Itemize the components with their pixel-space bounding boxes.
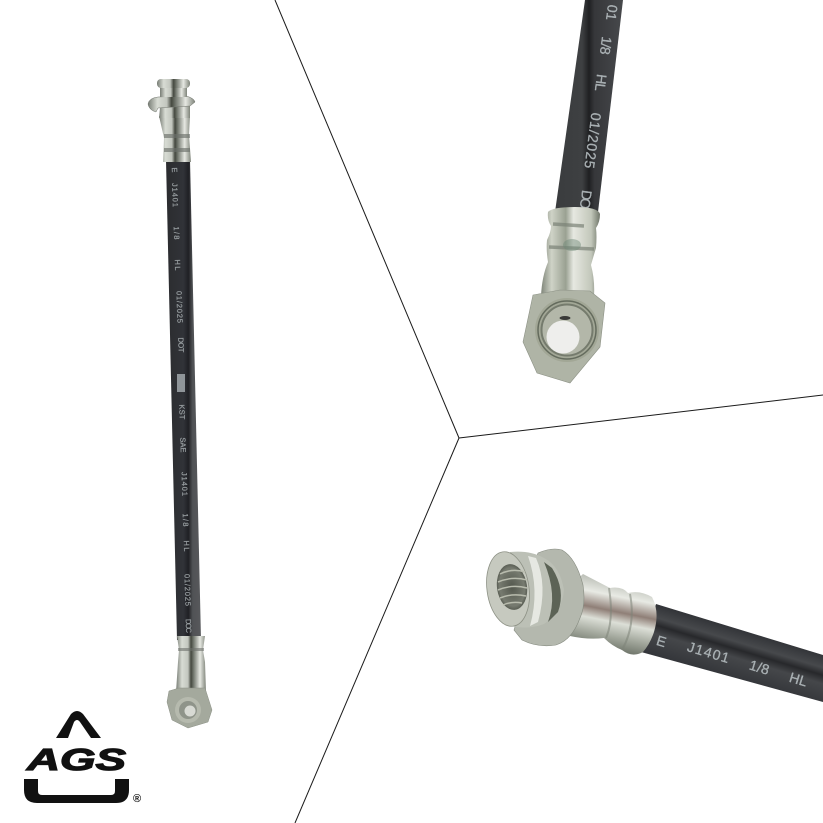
nut bore bbox=[535, 298, 599, 362]
bottom fitting bbox=[167, 636, 212, 728]
divider lines between views bbox=[275, 0, 823, 823]
hose markings: 1/8 bbox=[172, 226, 181, 240]
hose markings: 01 bbox=[603, 4, 621, 22]
hose markings bbox=[170, 167, 193, 634]
hex nut bbox=[523, 290, 605, 383]
AGS logo bbox=[24, 711, 141, 805]
logo bottom bracket bbox=[24, 779, 129, 803]
bottom right close-up: threaded end bbox=[482, 549, 823, 702]
logo top chevron bbox=[56, 711, 101, 738]
top right close-up: nut end bbox=[523, 0, 623, 383]
threaded boss bbox=[510, 552, 564, 628]
hose markings: HL bbox=[173, 259, 182, 271]
hose markings: HL bbox=[592, 73, 610, 92]
hose markings: HL bbox=[182, 540, 191, 552]
hose markings: 01/2025 bbox=[175, 291, 184, 323]
hose markings: J1401 bbox=[686, 638, 732, 666]
full brake hose view bbox=[148, 79, 212, 728]
hose markings: 01/2025 bbox=[183, 574, 192, 606]
registered mark: ® bbox=[133, 793, 141, 805]
hose markings: 1/8 bbox=[597, 36, 615, 56]
hose markings: DOT bbox=[176, 337, 186, 353]
hose markings: 1/8 bbox=[748, 657, 771, 678]
hose markings: J1401 bbox=[170, 183, 180, 207]
hose markings: DOC bbox=[184, 619, 193, 634]
hose markings: 01/2025 bbox=[581, 112, 604, 170]
top banjo fitting bbox=[148, 79, 195, 162]
threaded bore bbox=[494, 562, 530, 612]
hose markings: SAE bbox=[178, 437, 188, 453]
hose markings: E bbox=[170, 167, 179, 173]
crimp collar bbox=[541, 207, 600, 296]
crimp collar and cone bbox=[555, 574, 657, 655]
hose markings: KST bbox=[177, 404, 187, 420]
hose markings: E bbox=[655, 632, 668, 650]
hose markings: 1/8 bbox=[181, 513, 190, 527]
flange bbox=[514, 549, 584, 646]
hose markings bbox=[577, 4, 621, 210]
hose section bbox=[555, 0, 623, 212]
hose section bbox=[641, 604, 823, 702]
hose markings bbox=[655, 632, 810, 689]
hose markings: DO bbox=[577, 189, 595, 210]
hose markings: HL bbox=[788, 669, 810, 689]
logo wordmark: AGS bbox=[26, 742, 126, 777]
hose body bbox=[166, 160, 201, 640]
hose markings: J1401 bbox=[180, 472, 189, 496]
